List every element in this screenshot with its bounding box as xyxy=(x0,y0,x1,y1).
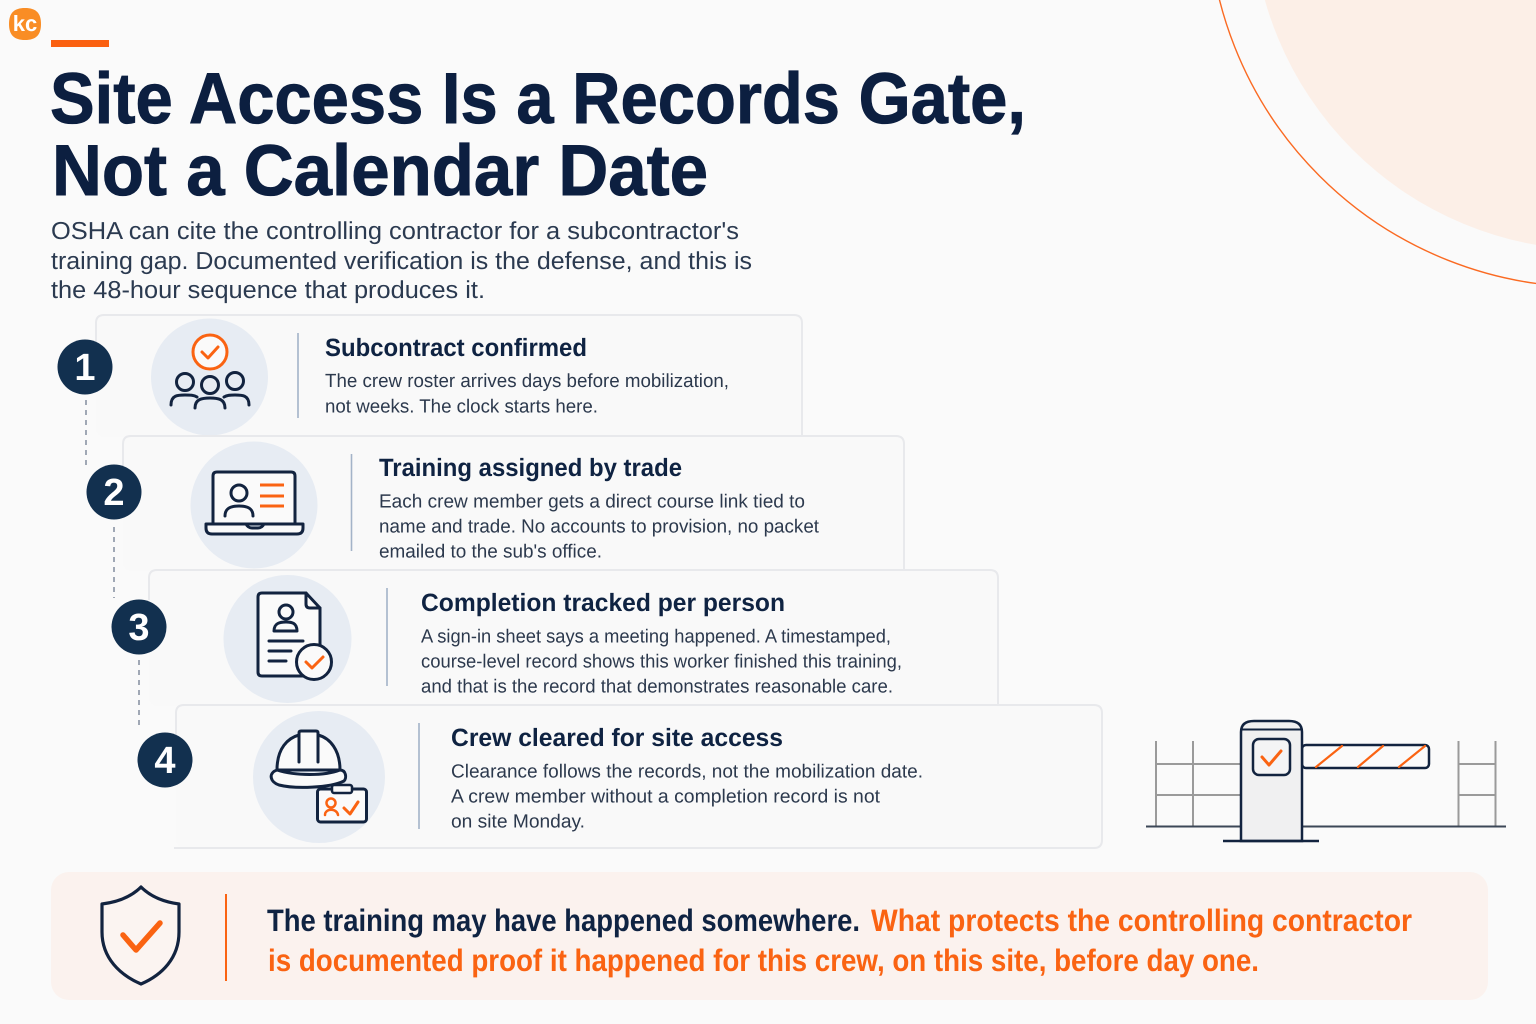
connector: step 2 to 3 xyxy=(113,527,115,598)
step 4 body xyxy=(451,762,923,832)
step 3 body: A sign-in sheet says a meeting happened. A timestamped, xyxy=(421,626,891,648)
step 4 body: Clearance follows the records, not the mobilization date. xyxy=(451,762,923,782)
panel: step 3 completion tracked xyxy=(149,570,998,706)
step 3 body: and that is the record that demonstrates reasonable care. xyxy=(421,676,893,698)
step 3 body xyxy=(421,626,902,698)
step 2 body: emailed to the sub's office. xyxy=(379,542,602,562)
callout text: The training may have happened somewhere. xyxy=(267,903,860,938)
number badge 3: 3 xyxy=(128,607,150,649)
icon: laptop with person xyxy=(190,442,318,568)
accent bar xyxy=(51,40,109,47)
step 2 body: name and trade. No accounts to provision, no packet xyxy=(379,516,820,538)
number badge 1 xyxy=(58,340,112,394)
subtitle text block: training gap. Documented verification is the defense, and this is xyxy=(51,248,752,275)
title: Not a Calendar Date xyxy=(52,131,708,211)
subtitle text block: OSHA can cite the controlling contractor for a subcontractor's xyxy=(51,218,739,245)
step 4 heading: Crew cleared for site access xyxy=(451,724,783,752)
step 2 body xyxy=(379,492,820,562)
logo: kc: kc xyxy=(13,11,37,36)
number badge 3 xyxy=(112,600,166,654)
decorative corner: peach circle and orange arc xyxy=(1208,0,1536,287)
step 2 heading: Training assigned by trade xyxy=(379,454,682,482)
icon: crew with check xyxy=(151,318,268,436)
connector: step 1 to 2 xyxy=(85,400,87,465)
icon: document with check xyxy=(224,575,352,703)
callout text xyxy=(267,903,1412,978)
step 4 body: on site Monday. xyxy=(451,812,585,832)
connector: step 3 to 4 xyxy=(138,660,140,730)
icon: shield with check xyxy=(102,887,179,984)
step 4 body: A crew member without a completion record is not xyxy=(451,786,881,808)
logo: kc xyxy=(9,8,41,40)
subtitle text block xyxy=(51,218,752,304)
title xyxy=(50,59,1026,211)
step 2 body: Each crew member gets a direct course link tied to xyxy=(379,492,805,512)
callout text: is documented proof it happened for this crew, on this site, before day one. xyxy=(268,943,1259,978)
step 1 body: The crew roster arrives days before mobilization, xyxy=(325,371,729,392)
step 1 heading: Subcontract confirmed xyxy=(325,334,587,362)
icon: hard hat and badge xyxy=(253,711,385,843)
callout text: What protects the controlling contractor xyxy=(871,903,1412,938)
number badge 4 xyxy=(138,732,192,788)
step 1 body: not weeks. The clock starts here. xyxy=(325,396,598,418)
subtitle text block: the 48-hour sequence that produces it. xyxy=(51,277,485,304)
number badge 2 xyxy=(86,464,142,520)
panel: step 2 training assigned xyxy=(123,436,904,571)
callout panel xyxy=(51,872,1488,1000)
panel: step 1 subcontract confirmed xyxy=(96,315,802,437)
step 3 body: course-level record shows this worker finished this training, xyxy=(421,652,902,672)
step 3 heading: Completion tracked per person xyxy=(421,589,785,617)
step 1 body xyxy=(325,371,729,418)
number badge 4: 4 xyxy=(154,740,176,782)
number badge 1: 1 xyxy=(74,347,96,389)
illustration: access gate with fence xyxy=(1146,721,1506,841)
title: Site Access Is a Records Gate, xyxy=(50,59,1026,139)
panel: step 4 crew cleared xyxy=(174,705,1102,848)
number badge 2: 2 xyxy=(103,472,125,514)
